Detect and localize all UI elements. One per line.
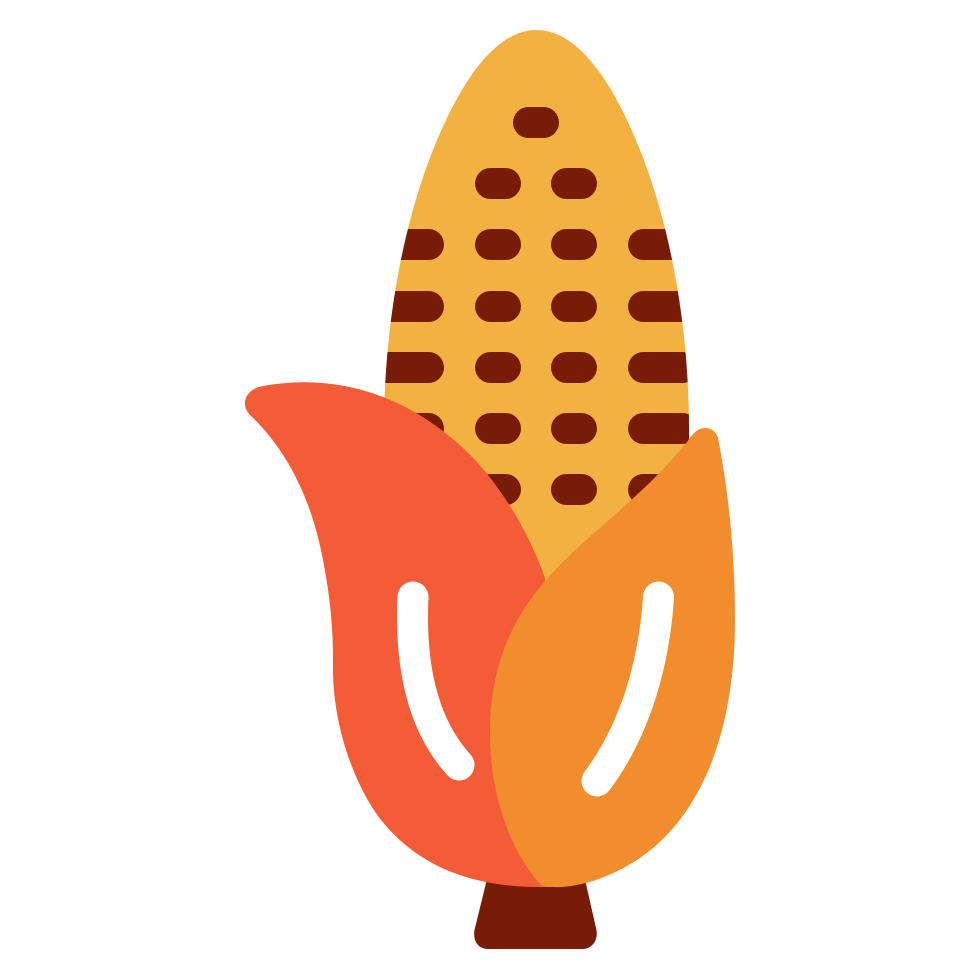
left husk leaf bbox=[245, 382, 560, 887]
stem bbox=[474, 875, 597, 949]
right husk leaf bbox=[490, 428, 735, 887]
icon: corn cob with husk bbox=[244, 30, 735, 949]
corn cob bbox=[370, 30, 698, 590]
corn kernels bbox=[370, 107, 698, 505]
left leaf vein bbox=[413, 597, 459, 765]
right leaf vein bbox=[597, 597, 658, 781]
